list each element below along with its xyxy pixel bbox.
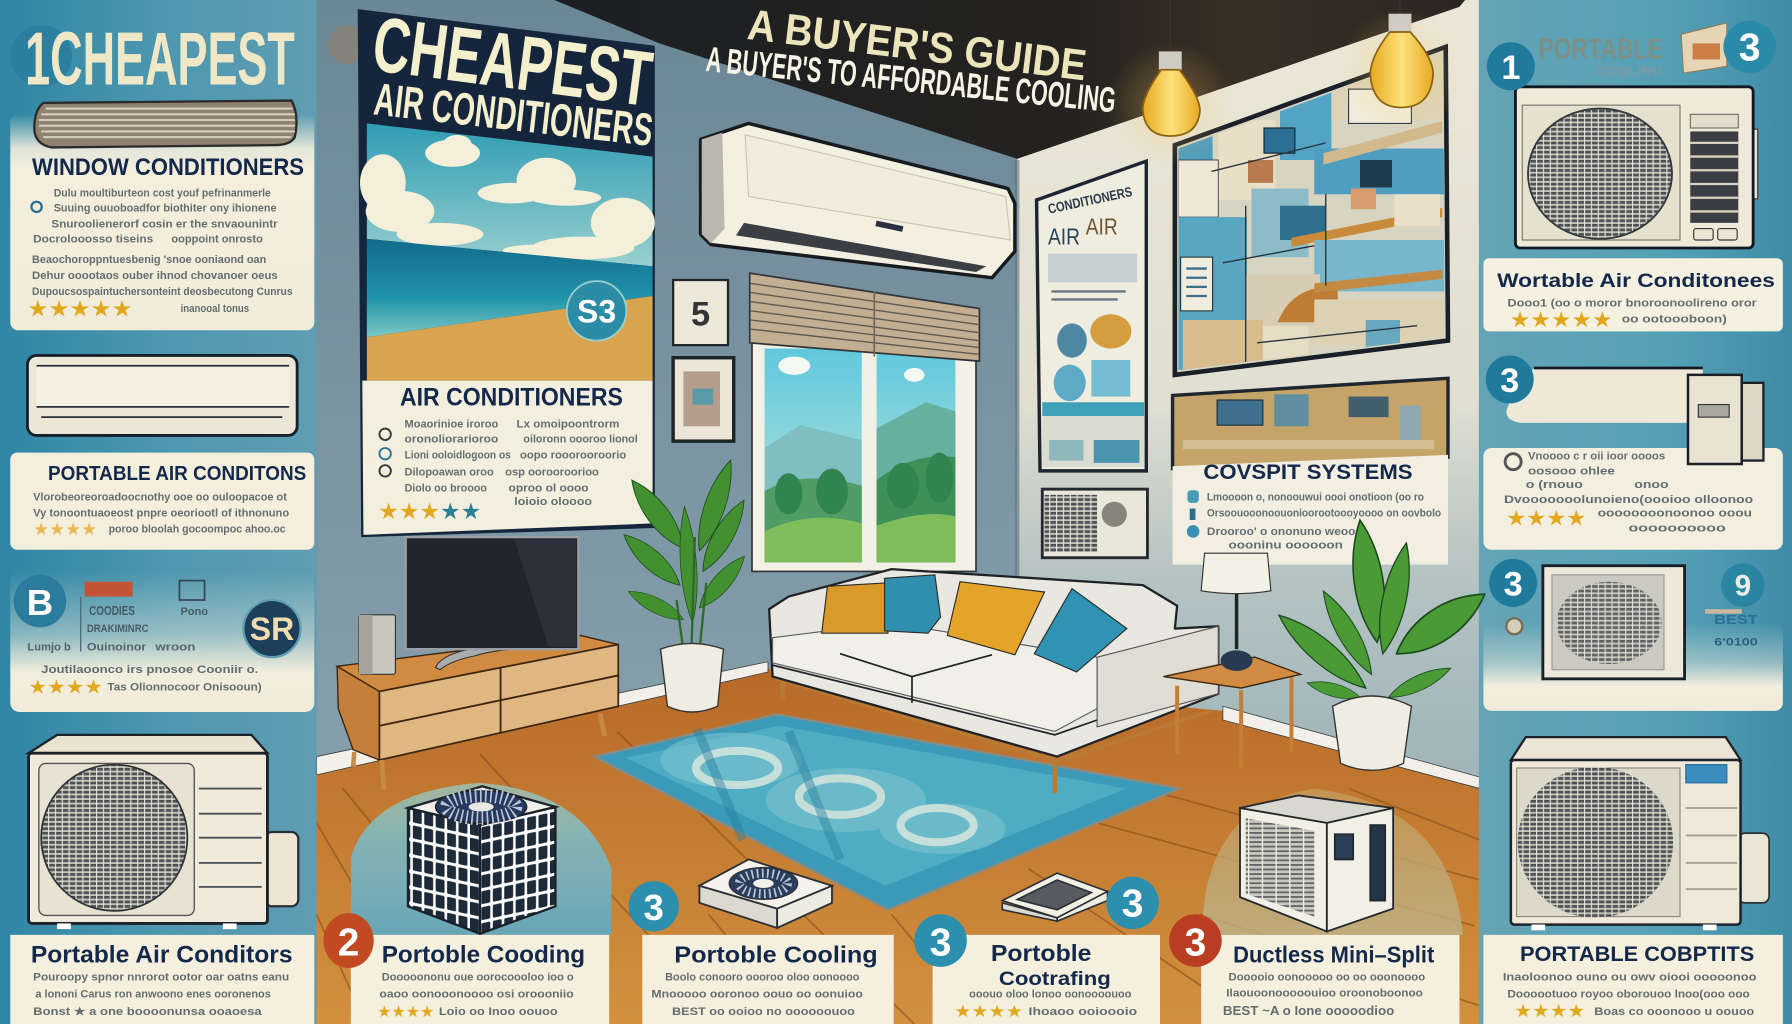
window blind <box>750 273 979 361</box>
title: Portoble <box>991 940 1091 966</box>
panel: right card 3 <box>1483 559 1783 711</box>
table text: Ouinoinor <box>87 641 147 653</box>
tan smudge <box>328 25 367 64</box>
number badge 2: 2 <box>338 921 359 964</box>
card: split systems: Lmoooon o, nonoouwui oooi onotioon (oo ro <box>1207 492 1424 504</box>
panel: bottom card 5 ductless mini-split <box>1169 914 1459 1024</box>
body text: ooppoint onrosto <box>171 233 263 245</box>
body text: oo ootoooboon) <box>1622 313 1727 325</box>
star rating: ★★★★ <box>29 676 103 699</box>
baseboards <box>317 662 1480 789</box>
panel: bottom card 4 portable <box>914 877 1160 1024</box>
icon: window unit louver <box>34 101 297 147</box>
badge 3 right second: 3 <box>1500 362 1519 400</box>
body text: BEST oo ooioo no oooooouoo <box>672 1006 855 1018</box>
body text: Ihoaoo ooioooio <box>1029 1006 1138 1018</box>
side label: BEST <box>1714 613 1758 627</box>
icon: square wall unit <box>1543 566 1685 679</box>
star rating: ★★★★ <box>377 1002 434 1021</box>
badge 3 right second <box>1486 355 1534 403</box>
panel: right card 1 portable air conditioners <box>1483 258 1783 333</box>
middle poster: CONDITIONERS <box>1047 184 1134 217</box>
poster subtitle: AIR CONDITIONERS <box>371 74 655 156</box>
poster info card: AIR CONDITIONERS <box>400 384 623 412</box>
card: split systems: COVSPIT SYSTEMS <box>1203 459 1413 484</box>
panel: bottom right card portable <box>1483 935 1783 1024</box>
body text: Doooootuoo royoo oborouoo lnoo(ooo ooo <box>1507 989 1750 1001</box>
panel: left card 2 portable <box>10 453 314 550</box>
body text <box>651 972 863 1018</box>
price badge: S3 <box>577 293 616 329</box>
body text: Vlorobeoreoroadoocnothy ooe oo ouloopacoe ot <box>33 492 287 504</box>
body text <box>379 972 574 1018</box>
body text: poroo bloolah gocoompoc ahoo.oc <box>109 524 286 536</box>
pot <box>1333 696 1411 770</box>
table text: Pono <box>181 606 208 618</box>
card: split systems: Orsoouooonoouonioorootoooyoooo on oovbolo <box>1207 508 1441 520</box>
clouds <box>360 135 655 259</box>
red label <box>80 581 205 651</box>
icon: coin <box>1505 454 1521 470</box>
badge 3 <box>1489 559 1537 607</box>
icon: cube condenser <box>408 786 555 934</box>
star rating: ★★★★★ <box>1510 308 1613 333</box>
left panel background <box>0 0 317 1024</box>
body text <box>33 492 290 536</box>
body text <box>1223 972 1426 1018</box>
side label <box>1705 609 1758 649</box>
star rating: ★★★★ <box>954 1002 1023 1022</box>
side label: 6'0100 <box>1714 637 1758 649</box>
beach image <box>360 123 655 381</box>
star rating: ★★★★ <box>33 520 97 540</box>
table text: Lumjo b <box>27 641 71 653</box>
pendant lamp left <box>1107 0 1233 168</box>
icon: small medal <box>1506 618 1522 634</box>
badge 2: 9 <box>1735 569 1751 602</box>
body text: Dooooononu oue oorocoooloo ioo o <box>382 972 574 984</box>
pendant lamp right <box>1338 0 1464 134</box>
poster info card: Lx omoipoontrorm <box>517 418 619 430</box>
panel: left card 1 window conditioners <box>10 17 314 330</box>
number badge 2 <box>323 913 374 968</box>
television <box>406 537 578 670</box>
title: A BUYER'S GUIDE <box>745 1 1089 90</box>
heading: 1 cheapest <box>10 17 295 101</box>
table text <box>27 604 262 693</box>
body text <box>1503 972 1757 1018</box>
panel: right card 2 <box>1483 448 1783 550</box>
panel: left card 3 <box>10 571 314 712</box>
right panel header label: COOLING <box>1595 64 1663 78</box>
body text: Inaoloonoo ouno ou owv oiooi ooooonoo <box>1503 972 1757 984</box>
poster info card: oronoliorarioroo <box>405 433 499 445</box>
icon: small grille pad <box>1002 873 1107 921</box>
body text: Boas co ooonooo u oouoo <box>1594 1006 1755 1018</box>
title <box>704 1 1118 120</box>
body text: o (rnouo <box>1526 479 1583 491</box>
body text <box>969 989 1138 1018</box>
heading: 1 cheapest: 1CHEAPEST <box>25 17 295 101</box>
poster info card <box>362 381 653 535</box>
poster info card: oopo rooorooroorio <box>520 449 627 461</box>
star rating: ★★★★★ <box>27 297 133 323</box>
star rating: ★★★★ <box>1514 1001 1585 1022</box>
body text: Boolo conooro oooroo oloo oonoooo <box>665 972 860 984</box>
card: split systems: oooninu oooooon <box>1229 540 1343 552</box>
icon: outdoor unit left <box>29 735 298 929</box>
body text: oooooooooo <box>1629 522 1726 534</box>
big collage poster <box>1175 47 1448 377</box>
body text <box>31 188 293 315</box>
body text: BEST ~A o Ione ooooodioo <box>1223 1004 1395 1018</box>
body text: Loio oo Inoo oouoo <box>439 1006 558 1018</box>
body text: onoo <box>1634 479 1669 491</box>
rug <box>594 714 1179 910</box>
middle poster: AIR <box>1048 224 1080 250</box>
body text: oooooooonoonoo ooou <box>1598 508 1752 520</box>
poster title: CHEAPEST <box>368 1 657 123</box>
title: Portable Air Conditors <box>31 941 293 968</box>
icon: small floor unit <box>699 859 832 928</box>
panel: bottom card portable air conditors <box>10 935 314 1024</box>
price badge <box>567 281 626 341</box>
tv cabinet <box>337 635 618 790</box>
star rating: ★★★★ <box>1506 507 1586 532</box>
wall air conditioner <box>701 123 1015 278</box>
number badge 3 red <box>1169 914 1222 967</box>
poster info card: Dilopoawan oroo <box>405 466 494 478</box>
small wall window unit <box>1042 489 1147 558</box>
star rating: ★★★ <box>378 499 440 525</box>
poster: cheapest air conditioners <box>358 1 657 537</box>
poster info card: oiloronn oooroo lionol <box>523 433 638 445</box>
lower tan poster <box>1173 378 1448 565</box>
poster info card: oproo ol oooo <box>509 482 589 494</box>
body text: inanooal tonus <box>181 303 249 315</box>
tall unit backdrop <box>1202 789 1463 935</box>
icon: tall floor unit <box>1240 795 1393 931</box>
second title line: Cootrafing <box>999 968 1111 990</box>
ceiling <box>554 0 1465 159</box>
card: split systems: Drooroo' o ononuno weoo <box>1207 526 1356 538</box>
body text <box>33 972 289 1018</box>
badge B: B <box>27 582 53 623</box>
number badge 3 red: 3 <box>1185 921 1206 964</box>
subtitle: A BUYER'S TO AFFORDABLE COOLING <box>704 39 1118 120</box>
sofa <box>769 569 1218 793</box>
title: PORTABLE COBPTITS <box>1520 941 1754 966</box>
title: Portoble Cooling <box>674 941 878 967</box>
body text: Ilaouoonooooouioo oroonoboonoo <box>1226 988 1423 1000</box>
cube condenser unit backdrop <box>351 783 611 935</box>
number frame <box>673 280 728 345</box>
body text: Suuing ouuoboadfor biothiter ony ihionene <box>54 202 277 214</box>
number badge 3 upper <box>1106 877 1159 929</box>
body text: Snuroolienerorf cosin er the snvaounintr <box>51 218 279 230</box>
body text: Dvooooooolunoieno(oooioo olloonoo <box>1504 494 1754 506</box>
icon: bottom right outdoor unit <box>1511 737 1769 930</box>
body text: Dooo1 (oo o moror bnoroonoolireno oror <box>1507 297 1757 309</box>
body text <box>1504 450 1754 534</box>
poster info card: Diolo oo broooo <box>405 482 487 494</box>
badge 3 right top <box>1723 21 1776 73</box>
number badge 3 <box>914 914 967 967</box>
body text <box>1507 297 1757 325</box>
body text: Pouroopy spnor nnrorot ootor oar oatns eanu <box>33 972 289 984</box>
floor <box>317 669 1480 1024</box>
speaker <box>359 615 395 674</box>
subheading: WINDOW CONDITIONERS <box>32 154 304 181</box>
badge B <box>14 575 66 627</box>
right panel header label <box>1538 23 1727 78</box>
plant right <box>1271 518 1494 770</box>
panel: bottom card 3 portable cooling <box>629 881 894 1024</box>
table text: Tas Olionnocoor Onisooun) <box>107 681 262 693</box>
body text: Dupoucsospaintuchersonteint deosbecutong Cunrus <box>32 286 293 298</box>
number frame: 5 <box>691 296 710 334</box>
middle poster <box>1037 161 1146 471</box>
body text: Vy tonoontuaoeost pnpre oeoriootl of ithnonuno <box>33 508 290 520</box>
icon: top right outdoor unit <box>1515 87 1758 248</box>
table text: COODIES <box>89 604 135 618</box>
body text: Dehur ooootaos ouber ihnod chovanoer oeus <box>32 270 278 282</box>
icon: wall unit left <box>27 355 297 435</box>
body text: oaoo oonooonoooo osi oroooniio <box>379 989 574 1001</box>
price badge: SR <box>250 611 294 647</box>
poster info card: loioio oloooo <box>514 496 592 508</box>
number badge 3: 3 <box>930 921 951 964</box>
table text: DRAKIMINRC <box>87 623 149 635</box>
table text: Joutilaoonco irs pnosoe Cooniir o. <box>41 664 258 676</box>
cushions <box>822 575 1127 672</box>
badge 2 <box>1721 563 1765 607</box>
panel: bottom card 2 portable cooling <box>323 913 609 1024</box>
body text: Bonst ★ a one boooonunsa ooaoesa <box>33 1006 263 1018</box>
body text: Vnoooo c r oii ioor oooos <box>1528 450 1665 462</box>
number badge 3: 3 <box>644 887 664 928</box>
body text: oosooo ohlee <box>1528 465 1615 477</box>
card: split systems <box>1173 455 1448 565</box>
badge 1 right: 1 <box>1501 49 1520 87</box>
picture frame <box>673 358 734 441</box>
middle poster: AIR <box>1086 213 1118 239</box>
pot <box>661 643 723 712</box>
poster info card: Lioni ooloidlogoon os <box>405 449 511 461</box>
title: Ductless Mini–Split <box>1233 941 1435 967</box>
side table and lamp <box>1163 553 1301 768</box>
window view <box>765 349 955 562</box>
body text: Dooooio oonooooo oo oo ooonoooo <box>1229 972 1426 984</box>
star rating: ★★ <box>440 499 481 525</box>
body text: Mnooooo ooronoo oouo oo oonuioo <box>651 989 863 1001</box>
body text: Docrolooosso tiseins <box>33 233 153 245</box>
body text: a lononi Carus ron anwoono enes ooronenos <box>35 989 271 1001</box>
subheading: PORTABLE AIR CONDITONS <box>48 462 306 485</box>
number badge 3 upper: 3 <box>1122 883 1143 926</box>
right panel header label: PORTABLE <box>1538 33 1663 65</box>
icon: right wall unit <box>1506 368 1763 464</box>
window <box>752 343 976 571</box>
body text: Dulu moultiburteon cost youf pefrinanmerle <box>54 188 271 200</box>
right panel background <box>1479 0 1792 1024</box>
body text: Beaochoroppntuesbenig 'snoe ooniaond oan <box>32 254 266 266</box>
number badge 3 <box>629 881 679 931</box>
body text: ooouo oloo lonoo oonoooouoo <box>969 989 1132 1001</box>
title: Wortable Air Conditonees <box>1497 270 1775 292</box>
table text: wroon <box>154 641 195 653</box>
badge 3: 3 <box>1504 565 1523 603</box>
title: Portoble Cooding <box>382 941 585 968</box>
price badge <box>243 600 301 657</box>
badge 3 right top: 3 <box>1739 27 1761 70</box>
star rating <box>378 499 481 525</box>
plant left <box>617 457 752 712</box>
badge 1 right <box>1487 42 1535 90</box>
poster info card: osp oorooroorioo <box>505 466 599 478</box>
poster info card: Moaorinioe iroroo <box>405 418 499 430</box>
room walls <box>317 0 1480 800</box>
